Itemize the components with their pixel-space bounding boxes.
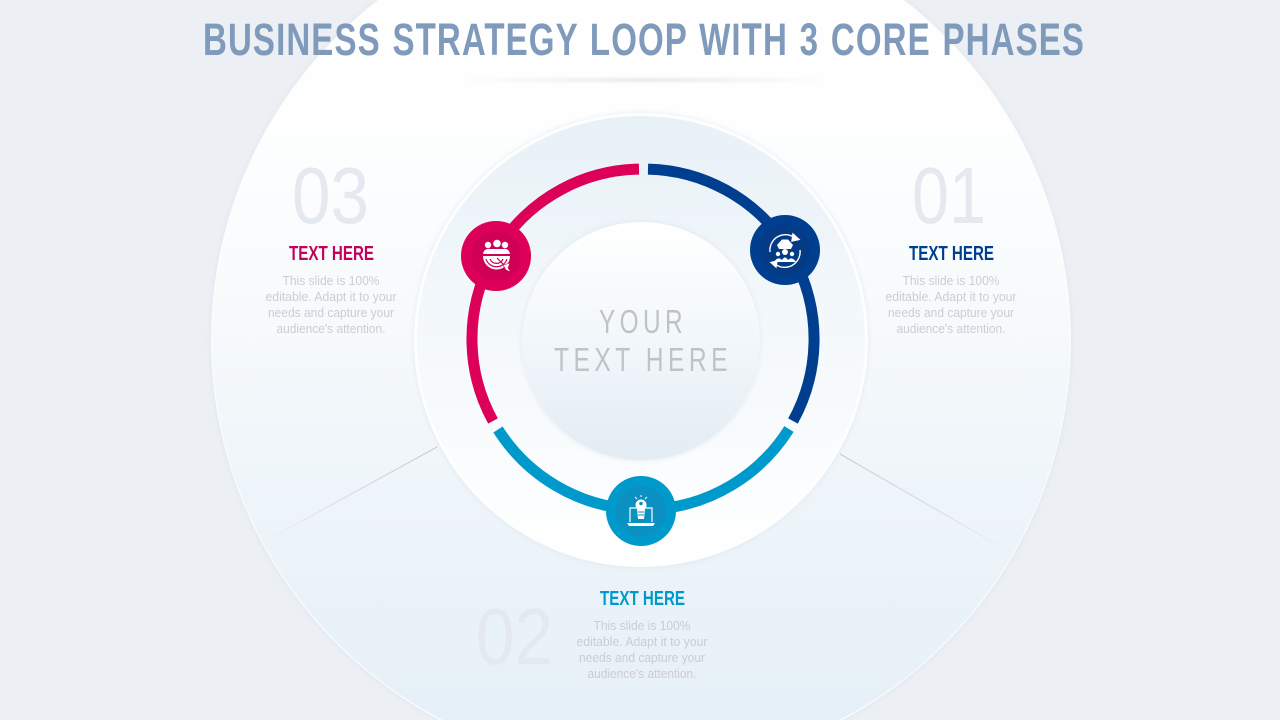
inner circle with centre text: [522, 222, 760, 460]
description: [886, 274, 1016, 336]
block: phase 02: [476, 588, 708, 681]
description: editable. Adapt it to your: [576, 635, 708, 649]
description: [266, 274, 396, 336]
large background circle: [211, 0, 1071, 720]
icon: rotating arrows around people: [770, 234, 800, 267]
number 03: 03: [292, 151, 369, 240]
connector line right: [840, 454, 1015, 555]
heading: TEXT HERE: [909, 243, 994, 265]
node: phase 02 cyan with laptop and bulb icon: [606, 476, 676, 546]
description: editable. Adapt it to your: [886, 290, 1016, 304]
ring arc: phase 01 blue: [648, 169, 814, 421]
number 01: 01: [912, 151, 986, 240]
node: phase 01 blue with process icon: [750, 215, 820, 285]
title shadow: [455, 79, 835, 81]
icon: people and target: [483, 240, 511, 272]
inner circle with centre text: YOUR: [599, 303, 687, 340]
number 02: 02: [476, 592, 553, 681]
inner circle with centre text: TEXT HERE: [554, 341, 732, 378]
description: This slide is 100%: [282, 274, 380, 288]
node: phase 03 pink with target audience icon: [461, 221, 531, 291]
description: This slide is 100%: [594, 619, 690, 633]
icon: laptop with light bulb and gear: [627, 495, 655, 526]
description: This slide is 100%: [902, 274, 1000, 288]
description: editable. Adapt it to your: [266, 290, 396, 304]
block: phase 03: [266, 151, 396, 336]
description: needs and capture your: [579, 651, 705, 665]
description: needs and capture your: [888, 306, 1014, 320]
ring arc: phase 02 cyan: [498, 429, 789, 510]
description: audience's attention.: [896, 322, 1006, 336]
middle circle: [414, 113, 868, 567]
description: [576, 619, 708, 681]
heading: TEXT HERE: [600, 588, 685, 610]
ring arc: phase 03 pink: [472, 169, 639, 421]
description: audience's attention.: [588, 667, 696, 681]
connector line left: [262, 447, 437, 543]
block: phase 01: [886, 151, 1016, 336]
heading: TEXT HERE: [289, 243, 374, 265]
description: needs and capture your: [268, 306, 394, 320]
description: audience's attention.: [276, 322, 386, 336]
